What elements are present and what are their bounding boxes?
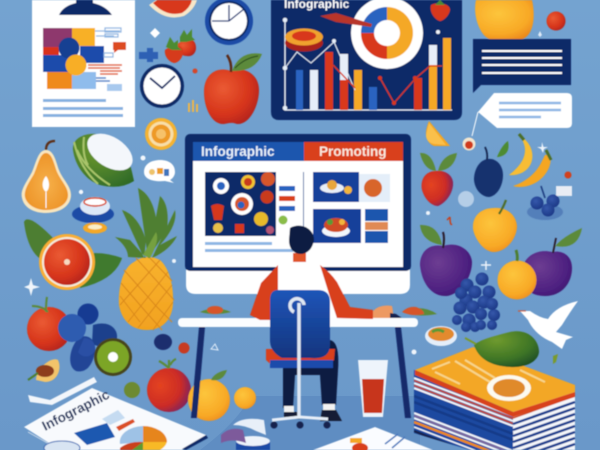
icon: pineapple — [115, 188, 177, 330]
head — [289, 226, 314, 254]
icon: orange fruit center right — [473, 200, 517, 252]
line charts — [285, 39, 442, 105]
pie chart — [120, 426, 167, 450]
leaf sprout — [553, 354, 558, 364]
icon: disc stack — [72, 197, 114, 223]
red sprig — [447, 217, 452, 224]
icon: dark plum — [474, 141, 509, 197]
title: Infographic — [40, 387, 112, 434]
screen labels — [365, 209, 388, 243]
icon: red apple bottom — [147, 359, 191, 412]
icon: mini bars — [189, 100, 197, 112]
icon: pear half — [22, 141, 71, 213]
icon: brochure stack — [414, 347, 575, 450]
purple ribbon — [221, 429, 246, 443]
icon: juice glass — [358, 360, 388, 417]
red left arm — [250, 265, 280, 320]
pen — [182, 435, 208, 450]
screen panel: dish — [313, 172, 390, 202]
light box — [102, 410, 125, 425]
icon: speech bubble small — [144, 160, 175, 183]
header: Promoting: Promoting — [319, 144, 386, 159]
shoes — [284, 410, 342, 421]
small glyph — [211, 344, 218, 350]
desk — [178, 318, 418, 418]
header: Infographic: Infographic — [201, 144, 275, 159]
sparkle — [426, 211, 430, 215]
panel: white speech box — [478, 93, 572, 128]
panel: document with block diagram — [32, 0, 135, 127]
icon: white bird — [518, 301, 578, 349]
caption lines — [205, 242, 293, 252]
white dot — [412, 350, 416, 354]
legend dashes — [278, 186, 295, 224]
sparkle dots — [140, 156, 146, 160]
icon: avocado — [465, 331, 539, 367]
desk fruit left — [200, 306, 231, 314]
chair base — [272, 417, 328, 420]
icon: tin can — [236, 436, 270, 450]
screen panel: salad — [313, 209, 361, 243]
icon: nut half — [28, 359, 59, 382]
icon: orange disc — [83, 222, 107, 234]
icon: wall clock top — [205, 0, 253, 45]
icon: small green fruit — [124, 382, 140, 398]
icon: grapefruit slice — [149, 0, 197, 18]
wheels — [270, 422, 330, 428]
icon: tape roll — [233, 419, 266, 435]
neck — [293, 253, 306, 262]
icon: food dish — [285, 28, 323, 52]
icon: grapes — [452, 272, 500, 332]
white dots — [172, 259, 176, 263]
red dot — [192, 68, 198, 74]
icon: small tomato — [431, 0, 450, 21]
desk fruit right — [402, 307, 437, 316]
icon: strawberry with leaves — [420, 153, 457, 206]
icon: sparkle — [150, 28, 160, 38]
floor shadow — [200, 396, 420, 450]
icon: kiwi — [94, 338, 132, 376]
white dot — [436, 30, 440, 34]
bar chart — [296, 38, 451, 110]
icon: large orange top — [475, 0, 534, 39]
sparkle — [538, 31, 542, 37]
panel: navy speech box — [473, 39, 571, 93]
icon: orange slice — [426, 121, 450, 146]
hand — [373, 306, 393, 318]
sparkle — [481, 261, 491, 270]
donut chart — [351, 0, 423, 69]
tag label — [556, 186, 572, 196]
icon: wall clock left — [140, 64, 184, 108]
sparkle — [24, 278, 40, 296]
stack sides — [414, 370, 575, 450]
sock — [284, 404, 335, 412]
icon: blueberry cluster — [58, 304, 117, 371]
screen panel: fruit collage — [205, 172, 276, 236]
stack top cover — [415, 347, 575, 412]
icon: orange bottom — [188, 370, 230, 421]
header: Promoting — [304, 142, 403, 161]
icon: plum right — [522, 228, 582, 296]
icon: small orange ball — [234, 387, 256, 409]
red tag — [116, 419, 135, 431]
icon: grapefruit half with leaves — [24, 219, 122, 290]
chair seat — [266, 349, 335, 368]
divider — [303, 172, 304, 234]
icon: apple left — [27, 297, 71, 351]
icon: coconut melon — [73, 126, 139, 187]
pen — [320, 13, 372, 27]
icon: plum left — [420, 225, 472, 296]
connector pin — [462, 112, 478, 150]
icon: bananas — [509, 134, 551, 187]
icon: lamp shape — [59, 0, 112, 15]
white seal — [458, 191, 474, 207]
white dot — [79, 190, 83, 194]
icon: strawberries — [165, 29, 196, 63]
icon: red berry — [546, 12, 566, 30]
icon: gear — [145, 118, 177, 150]
red right arm — [320, 265, 373, 319]
monitor — [185, 134, 411, 294]
panel: brochure bottom-left — [24, 387, 208, 450]
blue card — [74, 423, 115, 445]
screen — [193, 142, 403, 267]
icon: plus sign — [139, 48, 158, 62]
white torso — [278, 260, 337, 318]
chair backrest — [270, 290, 330, 358]
header: Infographic — [193, 142, 304, 161]
block diagram — [43, 28, 126, 91]
text lines — [43, 99, 123, 117]
icon: small orange — [498, 250, 536, 300]
axis markers — [283, 18, 287, 110]
office chair — [266, 290, 335, 428]
icon: round dish bottom-left — [44, 441, 80, 450]
icon: red apple — [204, 53, 262, 124]
icon: measuring tape — [28, 377, 97, 405]
icon: plum small — [154, 334, 172, 350]
icon: food bowl — [425, 326, 457, 346]
panel: bottom center brochure — [313, 427, 433, 450]
person at desk — [250, 226, 402, 421]
panel: top chart board — [271, 0, 462, 120]
legs — [283, 340, 338, 408]
chair pole — [290, 299, 304, 418]
sparkle — [537, 142, 548, 153]
red berry small — [178, 342, 190, 354]
red dot — [564, 172, 572, 178]
icon: blueberries — [527, 186, 563, 220]
keyboard — [390, 313, 402, 318]
vertical axis — [285, 20, 452, 110]
